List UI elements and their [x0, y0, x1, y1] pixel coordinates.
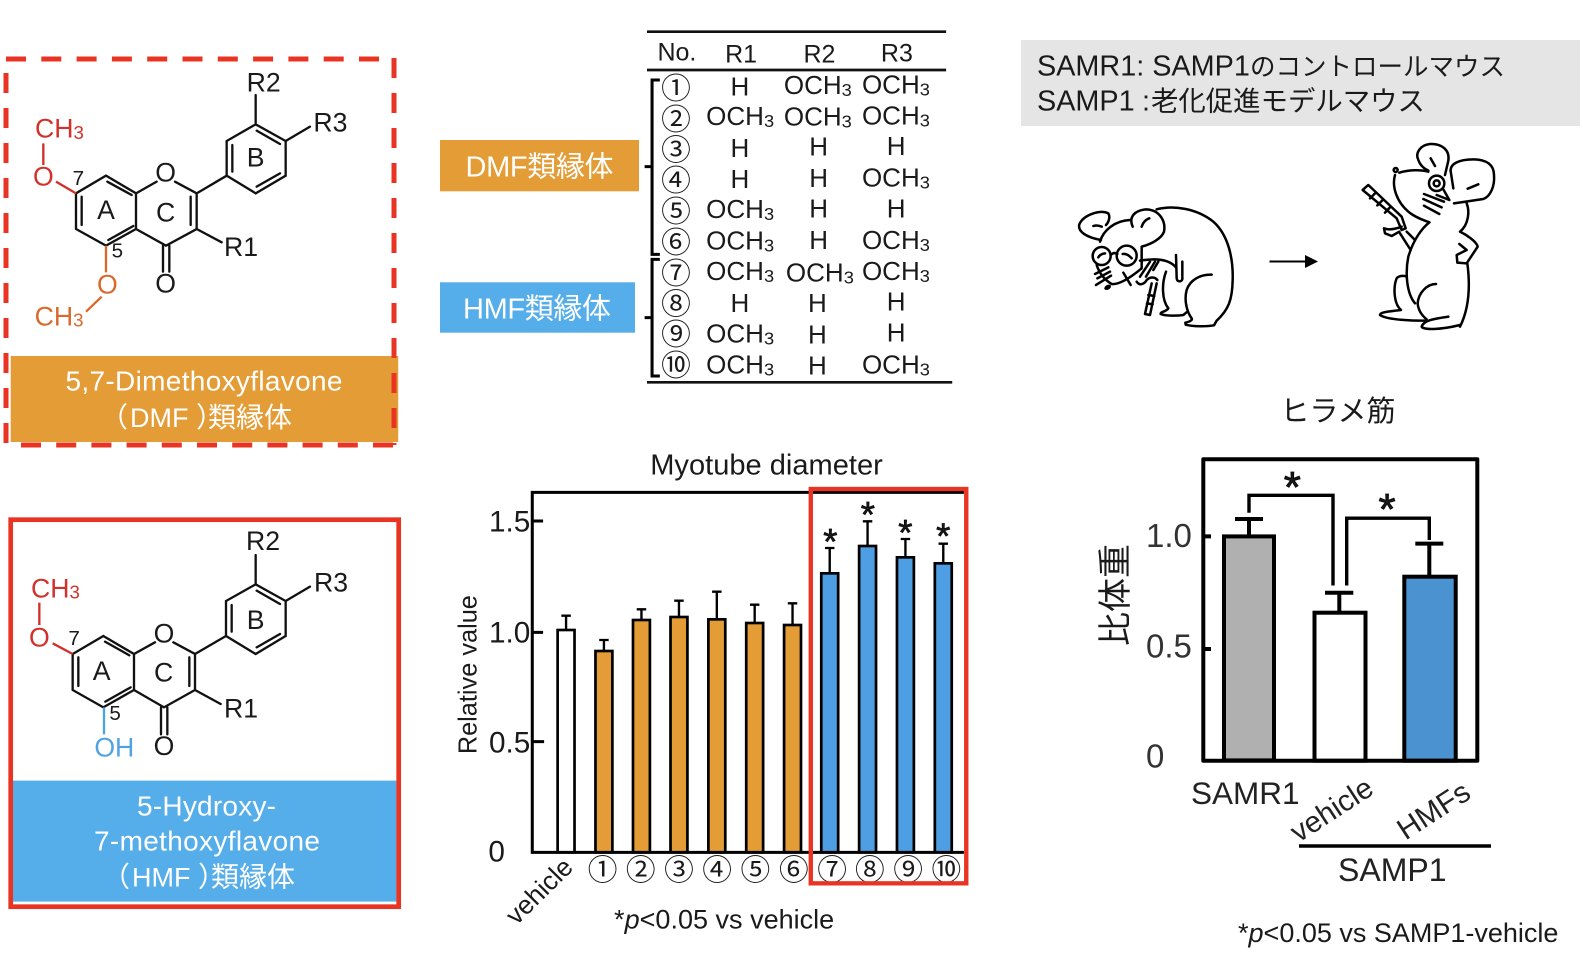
- significance asterisks: [1284, 463, 1396, 534]
- significance asterisks: [823, 494, 950, 562]
- bar chart: myotube diameter: [454, 450, 966, 934]
- chemical structure: HMF: R1: [224, 694, 258, 724]
- chemical structure: HMF: C: [154, 657, 173, 687]
- table text: ④: [661, 157, 691, 200]
- table text: H: [809, 165, 828, 193]
- table text: R3: [881, 41, 913, 68]
- significance asterisks: *: [861, 494, 875, 535]
- bars: [1224, 536, 1456, 761]
- label band: HMF analogues: 5-Hydroxy-: [137, 791, 276, 822]
- label band: DMF analogues: 5,7-Dimethoxyflavone: [66, 366, 342, 396]
- table text: OCH: [706, 196, 764, 224]
- y-axis labels: 1.5: [489, 506, 530, 538]
- table text: ⑧: [661, 280, 691, 323]
- group line: SAMP1: [1299, 844, 1491, 848]
- table text: ⑨: [661, 311, 691, 354]
- table text: No.: [657, 40, 696, 67]
- bar chart: myotube diameter: ③: [664, 846, 694, 889]
- bar chart: myotube diameter: ⑧: [855, 846, 885, 889]
- significance asterisks: *: [1284, 463, 1301, 512]
- chemical structure: HMF: O: [154, 619, 174, 649]
- chemical structure: DMF: CH: [35, 114, 74, 144]
- table text: H: [809, 134, 828, 162]
- badge: HMF analogues: [440, 282, 635, 333]
- table text: H: [731, 135, 749, 163]
- table text: R1: [725, 41, 757, 68]
- table text: 3: [844, 268, 854, 288]
- label band: DMF analogues: [11, 356, 398, 442]
- table text: OCH: [862, 164, 920, 192]
- axes frame: [532, 492, 964, 852]
- label band: DMF analogues: （: [100, 402, 128, 433]
- legend box: mouse strains: のコントロールマウス: [1250, 54, 1505, 82]
- table text: [657, 40, 930, 385]
- chemical structure: DMF: O: [155, 158, 176, 188]
- table text: ①: [661, 65, 691, 108]
- chemical structure: HMF: B: [247, 605, 265, 635]
- highlight frame: HMF analogues: [811, 489, 966, 883]
- label band: HMF analogues: HMF: [132, 863, 190, 893]
- bar chart: myotube diameter: ⑨: [893, 846, 923, 889]
- table text: H: [809, 227, 828, 255]
- label band: DMF analogues: ）: [196, 402, 224, 433]
- chemical structure: HMF: R3: [314, 568, 348, 598]
- table text: OCH: [706, 227, 764, 255]
- chemical structure: DMF: O: [155, 268, 176, 298]
- table text: ②: [661, 96, 691, 138]
- significance bracket: HMFs vs vehicle: [1347, 518, 1429, 586]
- table text: 3: [920, 359, 930, 379]
- panel: 5,7-dimethoxyflavone structure: [6, 58, 398, 445]
- label band: HMF analogues: 類縁体: [211, 862, 295, 893]
- bar chart: myotube diameter: ④: [702, 846, 732, 889]
- table text: H: [887, 133, 905, 161]
- chemical structure: DMF: O: [33, 162, 54, 192]
- table text: ⑩: [661, 342, 691, 385]
- y-axis labels: 1.0: [1146, 517, 1192, 554]
- badge: DMF analogues: [440, 140, 639, 191]
- table: substituents by compound: [645, 32, 952, 385]
- bracket: HMF group: [645, 259, 660, 376]
- label band: DMF analogues: DMF: [130, 403, 188, 433]
- chemical structure: HMF: 3: [70, 582, 80, 603]
- table text: 3: [764, 359, 774, 379]
- table text: H: [731, 166, 749, 194]
- significance asterisks: *: [823, 521, 837, 562]
- table text: 3: [842, 80, 852, 100]
- legend box: mouse strains: 老化促進モデルマウス: [1151, 86, 1425, 116]
- chemical structure: HMF: R2: [246, 526, 280, 556]
- table text: ⑦: [661, 250, 691, 292]
- y-axis labels: 0.5: [1146, 628, 1192, 664]
- table text: H: [887, 320, 905, 348]
- y-axis labels: 0.5: [489, 727, 530, 759]
- table text: H: [808, 322, 827, 350]
- table text: H: [887, 195, 905, 223]
- label band: HMF analogues: （: [102, 862, 130, 893]
- table text: H: [887, 289, 905, 317]
- bar chart: soleus muscle relative weight: HMFs: [1391, 775, 1476, 847]
- bar chart: myotube diameter: ②: [626, 846, 656, 889]
- table text: 3: [764, 111, 774, 131]
- table text: ③: [661, 126, 691, 169]
- chemical structure: DMF: B: [247, 143, 265, 173]
- label band: HMF analogues: ）: [198, 862, 226, 893]
- y-axis labels: 0: [488, 836, 505, 868]
- table text: H: [809, 196, 828, 224]
- y-axis labels: 1.0: [489, 617, 530, 649]
- table text: OCH: [786, 260, 844, 288]
- chemical structure: HMF: 5: [109, 702, 121, 725]
- table text: H: [731, 290, 749, 318]
- bracket: DMF group: [645, 80, 660, 254]
- table text: 3: [764, 266, 774, 286]
- error bars: [561, 521, 948, 651]
- icon: active mouse holding cane: [1363, 144, 1494, 329]
- chemical structure: DMF: A: [97, 195, 115, 225]
- table text: OCH: [862, 103, 920, 131]
- bar chart: myotube diameter: ⑩: [931, 846, 961, 889]
- table text: ⑤: [661, 188, 691, 231]
- chemical structure: DMF: R1: [224, 232, 258, 262]
- table text: 3: [920, 172, 930, 192]
- chart title: Myotube diameter: [650, 450, 883, 481]
- table text: 3: [764, 235, 774, 255]
- table text: H: [808, 352, 827, 380]
- bars: [558, 546, 952, 852]
- chemical structure: DMF: 7: [73, 167, 84, 190]
- badge: HMF analogues: HMF類縁体: [463, 292, 611, 326]
- bar chart: myotube diameter: ⑥: [779, 846, 809, 889]
- group label: SAMP1: SAMP1: [1338, 852, 1446, 888]
- table text: 3: [920, 266, 930, 286]
- significance asterisks: *: [936, 516, 950, 557]
- table text: OCH: [862, 71, 920, 99]
- table text: H: [731, 73, 749, 101]
- chart title: ヒラメ筋: [1280, 388, 1396, 430]
- chemical structure: HMF: A: [93, 656, 111, 686]
- table text: 3: [764, 204, 774, 224]
- bar chart: soleus muscle relative weight: [1088, 388, 1558, 948]
- table text: OCH: [706, 258, 764, 286]
- chemical structure: DMF: C: [156, 197, 175, 227]
- significance note: *p<0.05 vs vehicle: [614, 904, 834, 934]
- chemical structure: DMF: [33, 68, 347, 331]
- table text: 3: [920, 79, 930, 99]
- table text: H: [808, 290, 827, 318]
- chemical structure: DMF: 5: [112, 240, 123, 263]
- chemical structure: HMF: 7: [68, 627, 80, 650]
- y-axis labels: 0: [1146, 738, 1164, 774]
- table text: 3: [920, 235, 930, 255]
- table text: OCH: [706, 351, 764, 379]
- legend box: mouse strains: :: [1142, 86, 1150, 118]
- legend box: mouse strains: SAMR1: SAMP1: [1037, 50, 1250, 82]
- table text: OCH: [784, 104, 842, 132]
- dashed red frame: [6, 58, 394, 445]
- y-axis labels: [1146, 517, 1192, 774]
- y-axis title: 比体重: [1088, 544, 1137, 646]
- table text: ⑥: [661, 219, 691, 262]
- table text: OCH: [862, 351, 920, 379]
- chemical structure: DMF: R3: [313, 108, 347, 138]
- badge: DMF analogues: DMF類縁体: [466, 150, 614, 184]
- significance note: *p<0.05 vs SAMP1-vehicle: [1238, 918, 1558, 948]
- arrow: aged to rejuvenated mouse: [1270, 255, 1318, 268]
- table text: OCH: [784, 72, 842, 100]
- error bars: [1235, 519, 1443, 612]
- chemical structure: DMF: R2: [247, 68, 281, 98]
- table text: R2: [803, 41, 835, 68]
- bar chart: myotube diameter: ⑤: [740, 846, 770, 889]
- chemical structure: HMF: [29, 526, 348, 762]
- bar chart: myotube diameter: ⑦: [817, 846, 847, 889]
- panel: 5-hydroxy-7-methoxyflavone structure: [11, 520, 399, 907]
- significance bracket: SAMR1 vs vehicle: [1249, 495, 1333, 586]
- label band: HMF analogues: [13, 781, 396, 902]
- icon: aged mouse with cane: [1079, 208, 1233, 326]
- label band: DMF analogues: 類縁体: [208, 402, 292, 433]
- x-axis labels: SAMR1: [1191, 775, 1300, 811]
- legend box: mouse strains: [1021, 40, 1580, 126]
- chemical structure: DMF: O: [97, 270, 118, 300]
- table text: 3: [764, 328, 774, 348]
- table text: OCH: [862, 227, 920, 255]
- bar chart: myotube diameter: ①: [588, 846, 617, 889]
- chemical structure: HMF: O: [29, 622, 50, 652]
- bar chart: soleus muscle relative weight: vehicle: [1284, 771, 1379, 849]
- solid red frame: [11, 520, 399, 907]
- chemical structure: DMF: 3: [73, 310, 84, 331]
- table text: 3: [920, 111, 930, 131]
- legend box: mouse strains: SAMP1: [1037, 86, 1135, 118]
- chemical structure: DMF: 3: [74, 122, 84, 143]
- table text: OCH: [862, 258, 920, 286]
- chemical structure: DMF: CH: [35, 301, 73, 331]
- table text: 3: [842, 112, 852, 132]
- chemical structure: HMF: CH: [31, 573, 70, 603]
- chemical structure: HMF: O: [154, 731, 174, 761]
- significance asterisks: *: [898, 512, 913, 553]
- x-axis labels: vehicle: [499, 852, 579, 930]
- label band: HMF analogues: 7-methoxyflavone: [94, 826, 320, 857]
- table text: OCH: [706, 103, 764, 131]
- table text: OCH: [706, 320, 764, 348]
- y-axis labels: [488, 506, 530, 868]
- chemical structure: HMF: OH: [94, 732, 134, 762]
- significance asterisks: *: [1378, 485, 1396, 534]
- axes frame: [1203, 459, 1477, 761]
- y-axis title: Relative value: [454, 595, 483, 754]
